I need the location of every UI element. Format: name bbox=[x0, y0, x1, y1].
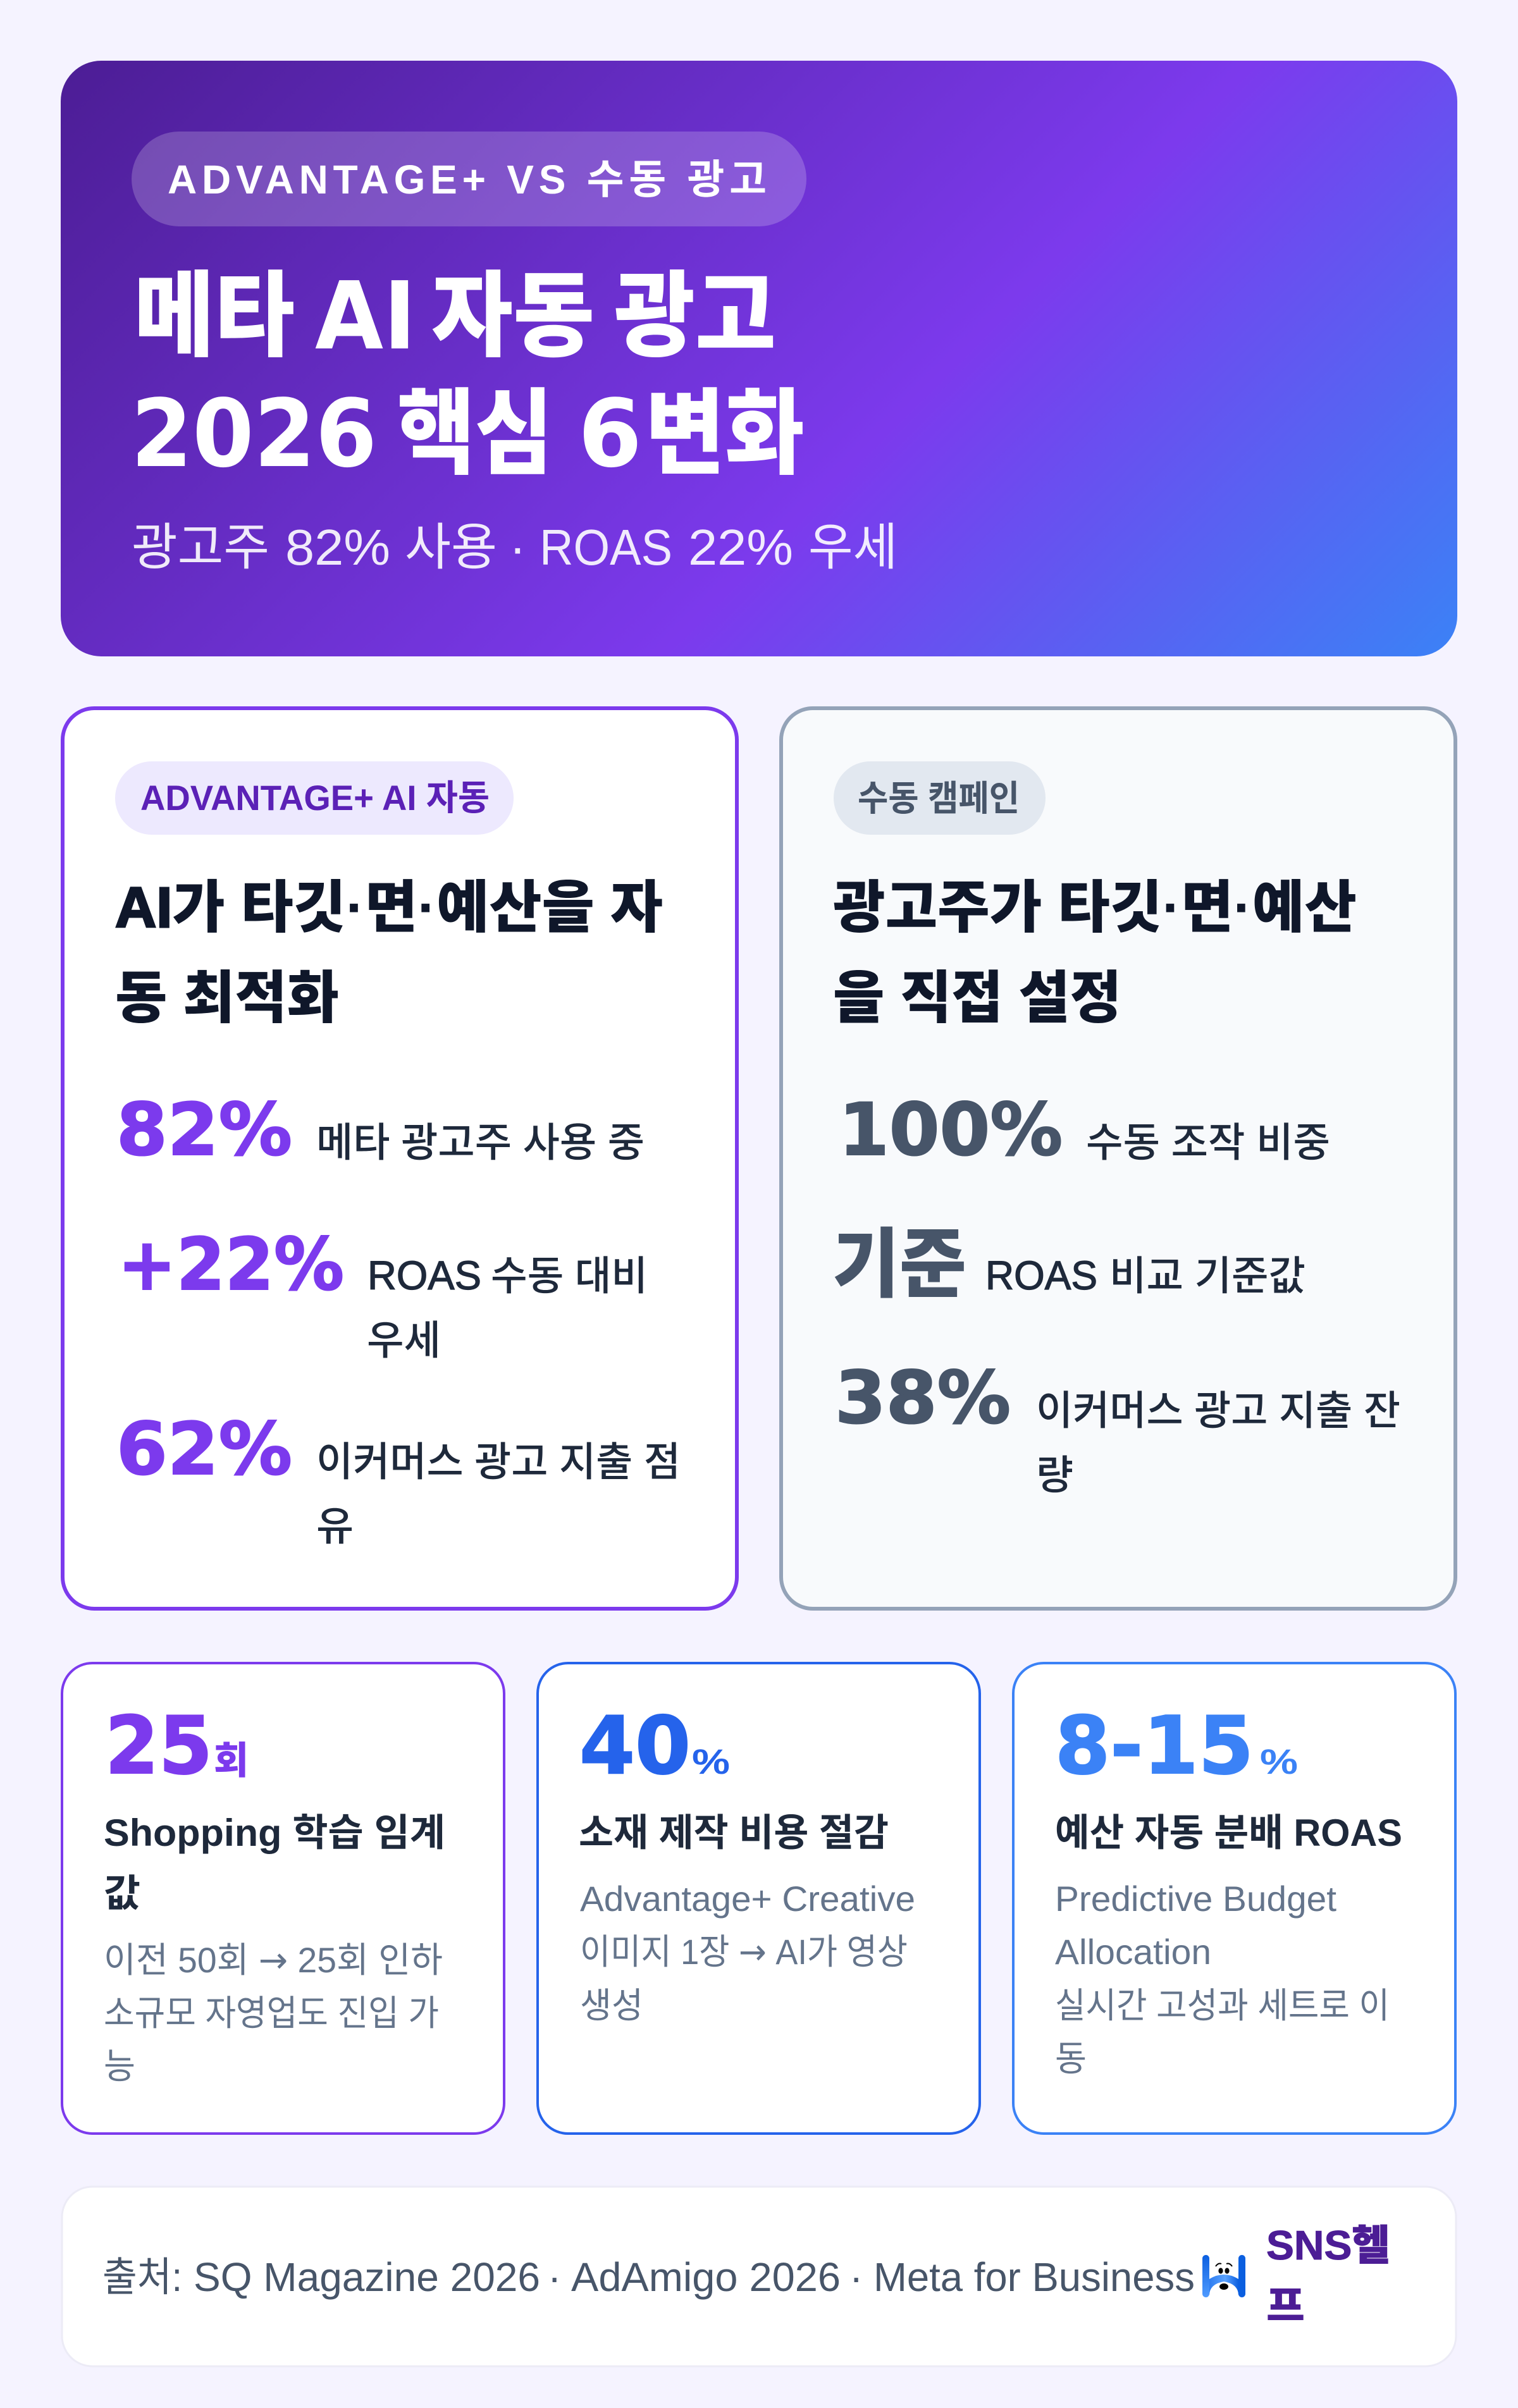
hero tag pill: ADVANTAGE+ VS 수동 광고 bbox=[168, 157, 767, 202]
stat: 38%: 38% bbox=[835, 1356, 1011, 1440]
source text: · bbox=[548, 2254, 561, 2300]
card description: 이전 50회 → 25회 인하 bbox=[104, 1940, 443, 1981]
hero subtitle: · bbox=[509, 519, 526, 575]
card title bbox=[104, 1812, 445, 1915]
card description: 실시간 고성과 세트로 이 bbox=[1055, 1986, 1390, 2025]
hero title: 메타 bbox=[134, 264, 295, 369]
metric: 8-15%: 8-15 bbox=[1055, 1699, 1254, 1792]
stat: 38%: 이커머스 광고 지출 잔 bbox=[1036, 1388, 1400, 1434]
card: Shopping threshold bbox=[62, 1663, 504, 2134]
hero subtitle: 우세 bbox=[808, 519, 898, 575]
stat: 100%: 100% bbox=[839, 1088, 1063, 1172]
heading: manual campaign: 광고주가 타깃·면·예산 bbox=[833, 876, 1357, 940]
stat: baseline: 비교 기준값 bbox=[1109, 1253, 1305, 1299]
heading: Advantage+ AI bbox=[115, 876, 663, 1030]
hero title: 6 bbox=[578, 379, 642, 488]
card description: 능 bbox=[104, 2046, 135, 2086]
source text: · bbox=[849, 2254, 863, 2300]
stat: 82%: 메타 광고주 사용 중 bbox=[316, 1120, 645, 1165]
card description: 이미지 1장 → AI가 영상 bbox=[580, 1932, 908, 1973]
stat: 62%: 62% bbox=[116, 1407, 292, 1491]
card description: Allocation bbox=[1055, 1932, 1211, 1972]
source text: SQ Magazine 2026 bbox=[194, 2254, 540, 2300]
card title: 값 bbox=[104, 1872, 140, 1915]
card: budget allocation bbox=[1013, 1663, 1455, 2134]
stat: 82%: 82% bbox=[116, 1088, 292, 1172]
source text: AdAmigo 2026 bbox=[571, 2254, 841, 2300]
hero title: 변화 bbox=[645, 382, 805, 486]
hero title: 핵심 bbox=[397, 382, 553, 486]
tag: manual campaign: 수동 캠페인 bbox=[858, 778, 1020, 818]
card title: 소재 제작 비용 절감 bbox=[579, 1812, 889, 1854]
heading: manual campaign bbox=[833, 876, 1357, 1030]
hero subtitle: 22% bbox=[688, 519, 793, 575]
stat: 62% bbox=[116, 1407, 681, 1549]
stat: +22%: 수동 대비 bbox=[491, 1253, 648, 1299]
card description bbox=[104, 1940, 443, 2086]
stat: +22%: 우세 bbox=[367, 1318, 441, 1363]
heading: Advantage+ AI: AI가 타깃·면·예산을 자 bbox=[115, 876, 663, 940]
card description: 생성 bbox=[580, 1986, 643, 2025]
heading: Advantage+ AI: 동 최적화 bbox=[115, 967, 339, 1030]
hero subtitle: ROAS bbox=[540, 519, 672, 575]
tag: Advantage+ AI: ADVANTAGE+ AI 자동 bbox=[140, 778, 490, 818]
stat: 38%: 량 bbox=[1036, 1453, 1073, 1498]
hero banner bbox=[61, 61, 1457, 656]
card title: Shopping 학습 임계 bbox=[104, 1812, 445, 1854]
card description bbox=[580, 1879, 915, 2025]
hero subtitle: 광고주 bbox=[132, 519, 269, 575]
metric: 25: 25 bbox=[105, 1699, 213, 1792]
hero subtitle bbox=[132, 519, 898, 575]
hero title: AI bbox=[315, 262, 416, 371]
stat: 62%: 이커머스 광고 지출 점 bbox=[316, 1439, 681, 1485]
metric: 8-15%: % bbox=[1260, 1742, 1298, 1781]
source text: 출처: bbox=[102, 2254, 182, 2300]
stat: 38% bbox=[835, 1356, 1400, 1498]
stat: 82% bbox=[116, 1088, 645, 1172]
stat: 100% bbox=[839, 1088, 1330, 1172]
hero subtitle: 82% bbox=[285, 519, 390, 575]
source text: Meta for Business bbox=[873, 2254, 1195, 2300]
hero title: 2026 bbox=[131, 379, 377, 488]
stat: 62%: 유 bbox=[316, 1504, 354, 1549]
metric: 40%: % bbox=[692, 1742, 730, 1781]
hero tag pill bbox=[132, 132, 806, 226]
panel: Advantage+ AI bbox=[63, 708, 737, 1609]
brand name: 프 bbox=[1266, 2283, 1305, 2329]
stat: 100%: 수동 조작 비중 bbox=[1086, 1120, 1330, 1165]
brand name: SNS헬 bbox=[1266, 2222, 1390, 2268]
stat: baseline bbox=[832, 1222, 1305, 1307]
metric: 25: 회 bbox=[214, 1740, 249, 1782]
tag: Advantage+ AI bbox=[115, 761, 514, 835]
hero title: 광고 bbox=[614, 264, 776, 369]
hero title: 자동 bbox=[431, 264, 595, 369]
tag: manual campaign bbox=[834, 761, 1046, 835]
stat: baseline: 기준 bbox=[832, 1222, 966, 1307]
stat: +22%: +22% bbox=[118, 1222, 344, 1306]
hero title bbox=[131, 262, 805, 488]
card description: Predictive Budget bbox=[1055, 1879, 1336, 1919]
icon: SNS help logo bbox=[1202, 2255, 1245, 2297]
card description: 동 bbox=[1055, 2039, 1087, 2079]
source text bbox=[102, 2254, 1195, 2300]
hero subtitle: 사용 bbox=[405, 519, 497, 575]
card title: 예산 자동 분배 ROAS bbox=[1055, 1812, 1402, 1854]
card description: Advantage+ Creative bbox=[580, 1879, 915, 1919]
stat: +22% bbox=[118, 1222, 648, 1363]
panel: manual campaign bbox=[781, 708, 1455, 1609]
heading: manual campaign: 을 직접 설정 bbox=[833, 967, 1121, 1030]
stat: baseline: ROAS bbox=[985, 1253, 1097, 1298]
stat: +22%: ROAS bbox=[367, 1253, 481, 1298]
brand name bbox=[1266, 2222, 1390, 2329]
card description bbox=[1055, 1879, 1390, 2079]
card description: 소규모 자영업도 진입 가 bbox=[104, 1993, 439, 2033]
footer bbox=[62, 2187, 1456, 2366]
card: creative cost bbox=[538, 1663, 980, 2134]
metric: 40%: 40 bbox=[579, 1699, 691, 1792]
